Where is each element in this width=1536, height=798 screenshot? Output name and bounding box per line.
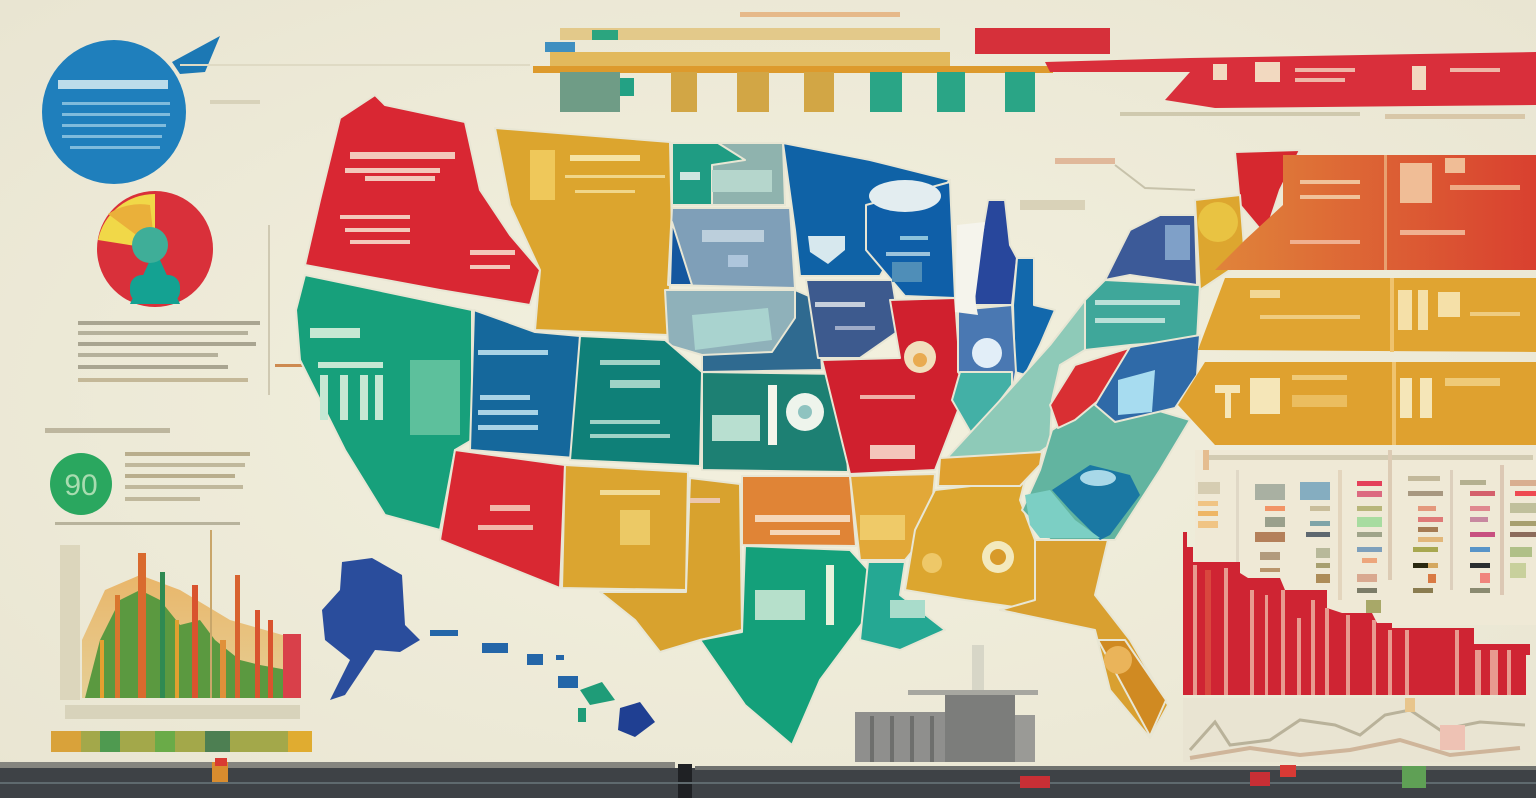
state: Florida tip bbox=[1098, 640, 1166, 736]
state: Oklahoma bbox=[742, 476, 856, 546]
state: California and Nevada bbox=[296, 275, 472, 530]
area bar chart bbox=[60, 530, 301, 719]
column 4 bbox=[1357, 481, 1382, 613]
connector lines and labels bbox=[180, 64, 1195, 210]
label block: Washington bbox=[340, 152, 515, 269]
state: Connecticut badge bbox=[1195, 195, 1245, 290]
label block: Missouri bbox=[860, 341, 936, 459]
state: West Virginia red bbox=[1050, 347, 1132, 428]
state: New York bbox=[1105, 215, 1197, 285]
Hawaii and islands bbox=[430, 630, 655, 737]
red top-right banner bbox=[1045, 52, 1536, 119]
column 2 bbox=[1255, 484, 1285, 572]
Alaska bbox=[322, 558, 420, 700]
state: Kentucky and Virginia bbox=[945, 300, 1085, 460]
pie chart bbox=[97, 191, 213, 307]
label block: California bbox=[310, 328, 460, 435]
US map bbox=[296, 95, 1300, 745]
label block: Utah and Colorado bbox=[478, 350, 670, 438]
state: Idaho and Montana bbox=[495, 128, 672, 335]
state: Colorado bbox=[570, 336, 702, 466]
state: North Dakota bbox=[672, 143, 785, 205]
North Dakota grey corner bbox=[712, 143, 785, 205]
top header bars bbox=[533, 12, 1110, 112]
column 3 bbox=[1300, 482, 1330, 583]
state: South Dakota bbox=[668, 208, 795, 288]
blue callout circle bbox=[42, 36, 220, 184]
icon: white lake bbox=[955, 222, 985, 315]
left text block bbox=[78, 225, 305, 395]
dark bottom band bbox=[0, 758, 1536, 798]
green badge with note bbox=[45, 428, 250, 525]
state: Missouri and Illinois bbox=[822, 298, 962, 474]
state: Michigan bbox=[973, 200, 1017, 305]
column 6 bbox=[1460, 480, 1495, 593]
icon: Kansas ten badge bbox=[712, 385, 824, 445]
state: Indiana bbox=[958, 305, 1016, 392]
state: Louisiana bbox=[860, 562, 945, 650]
label block: Arizona and New Mexico bbox=[478, 490, 720, 545]
South Dakota blue wedge bbox=[670, 222, 692, 285]
state: Pennsylvania bbox=[1085, 280, 1200, 350]
right panel: red-orange row bbox=[1215, 155, 1536, 270]
Nebraska dark corner bbox=[702, 290, 822, 372]
icon: globe and shield on Minnesota bbox=[808, 180, 941, 330]
map labels bbox=[310, 150, 1238, 674]
column 7 bbox=[1510, 480, 1536, 578]
right data table bbox=[1195, 450, 1536, 625]
bottom color strip bbox=[51, 731, 312, 752]
state: West Texas bbox=[600, 478, 742, 652]
state: Iowa bbox=[806, 280, 900, 358]
state: Nebraska bbox=[665, 290, 822, 372]
state: Maine bbox=[1235, 150, 1300, 235]
bar dividers bbox=[1193, 565, 1511, 695]
state: Minnesota bbox=[783, 143, 950, 276]
state: Kansas bbox=[702, 372, 848, 472]
line chart panel bbox=[1183, 698, 1530, 762]
right panel: gold row bbox=[1198, 278, 1536, 352]
label block: Oklahoma and Texas bbox=[755, 515, 850, 625]
column 1 bbox=[1198, 482, 1220, 528]
state: Carolinas bbox=[1022, 395, 1190, 540]
green badge with note: 90 bbox=[64, 469, 98, 502]
state: Utah bbox=[470, 310, 580, 458]
right panel: lower gold row bbox=[1178, 362, 1536, 445]
column 5 bbox=[1408, 476, 1443, 593]
label block: East coast bbox=[972, 202, 1238, 674]
red bar chart bbox=[1183, 532, 1530, 695]
state: Mississippi and Alabama bbox=[905, 480, 1035, 610]
icon: Alabama circle badge bbox=[860, 515, 1014, 618]
state: Arizona bbox=[440, 450, 565, 588]
state: Florida and Georgia bbox=[1000, 540, 1168, 738]
state: Arkansas bbox=[850, 474, 935, 560]
label block: Dakotas bbox=[680, 170, 772, 350]
state: Virginia blue bbox=[1095, 335, 1200, 422]
grey factory bbox=[855, 645, 1038, 762]
Indiana teal base bbox=[952, 372, 1012, 440]
label block: Montana bbox=[530, 150, 665, 200]
state: East Texas bbox=[700, 546, 870, 745]
state: New Mexico bbox=[562, 465, 688, 590]
state: Wisconsin bbox=[866, 182, 955, 298]
state: Tennessee bbox=[938, 452, 1042, 486]
state: Washington and Oregon bbox=[305, 95, 540, 305]
state: Ohio bbox=[1013, 258, 1055, 375]
